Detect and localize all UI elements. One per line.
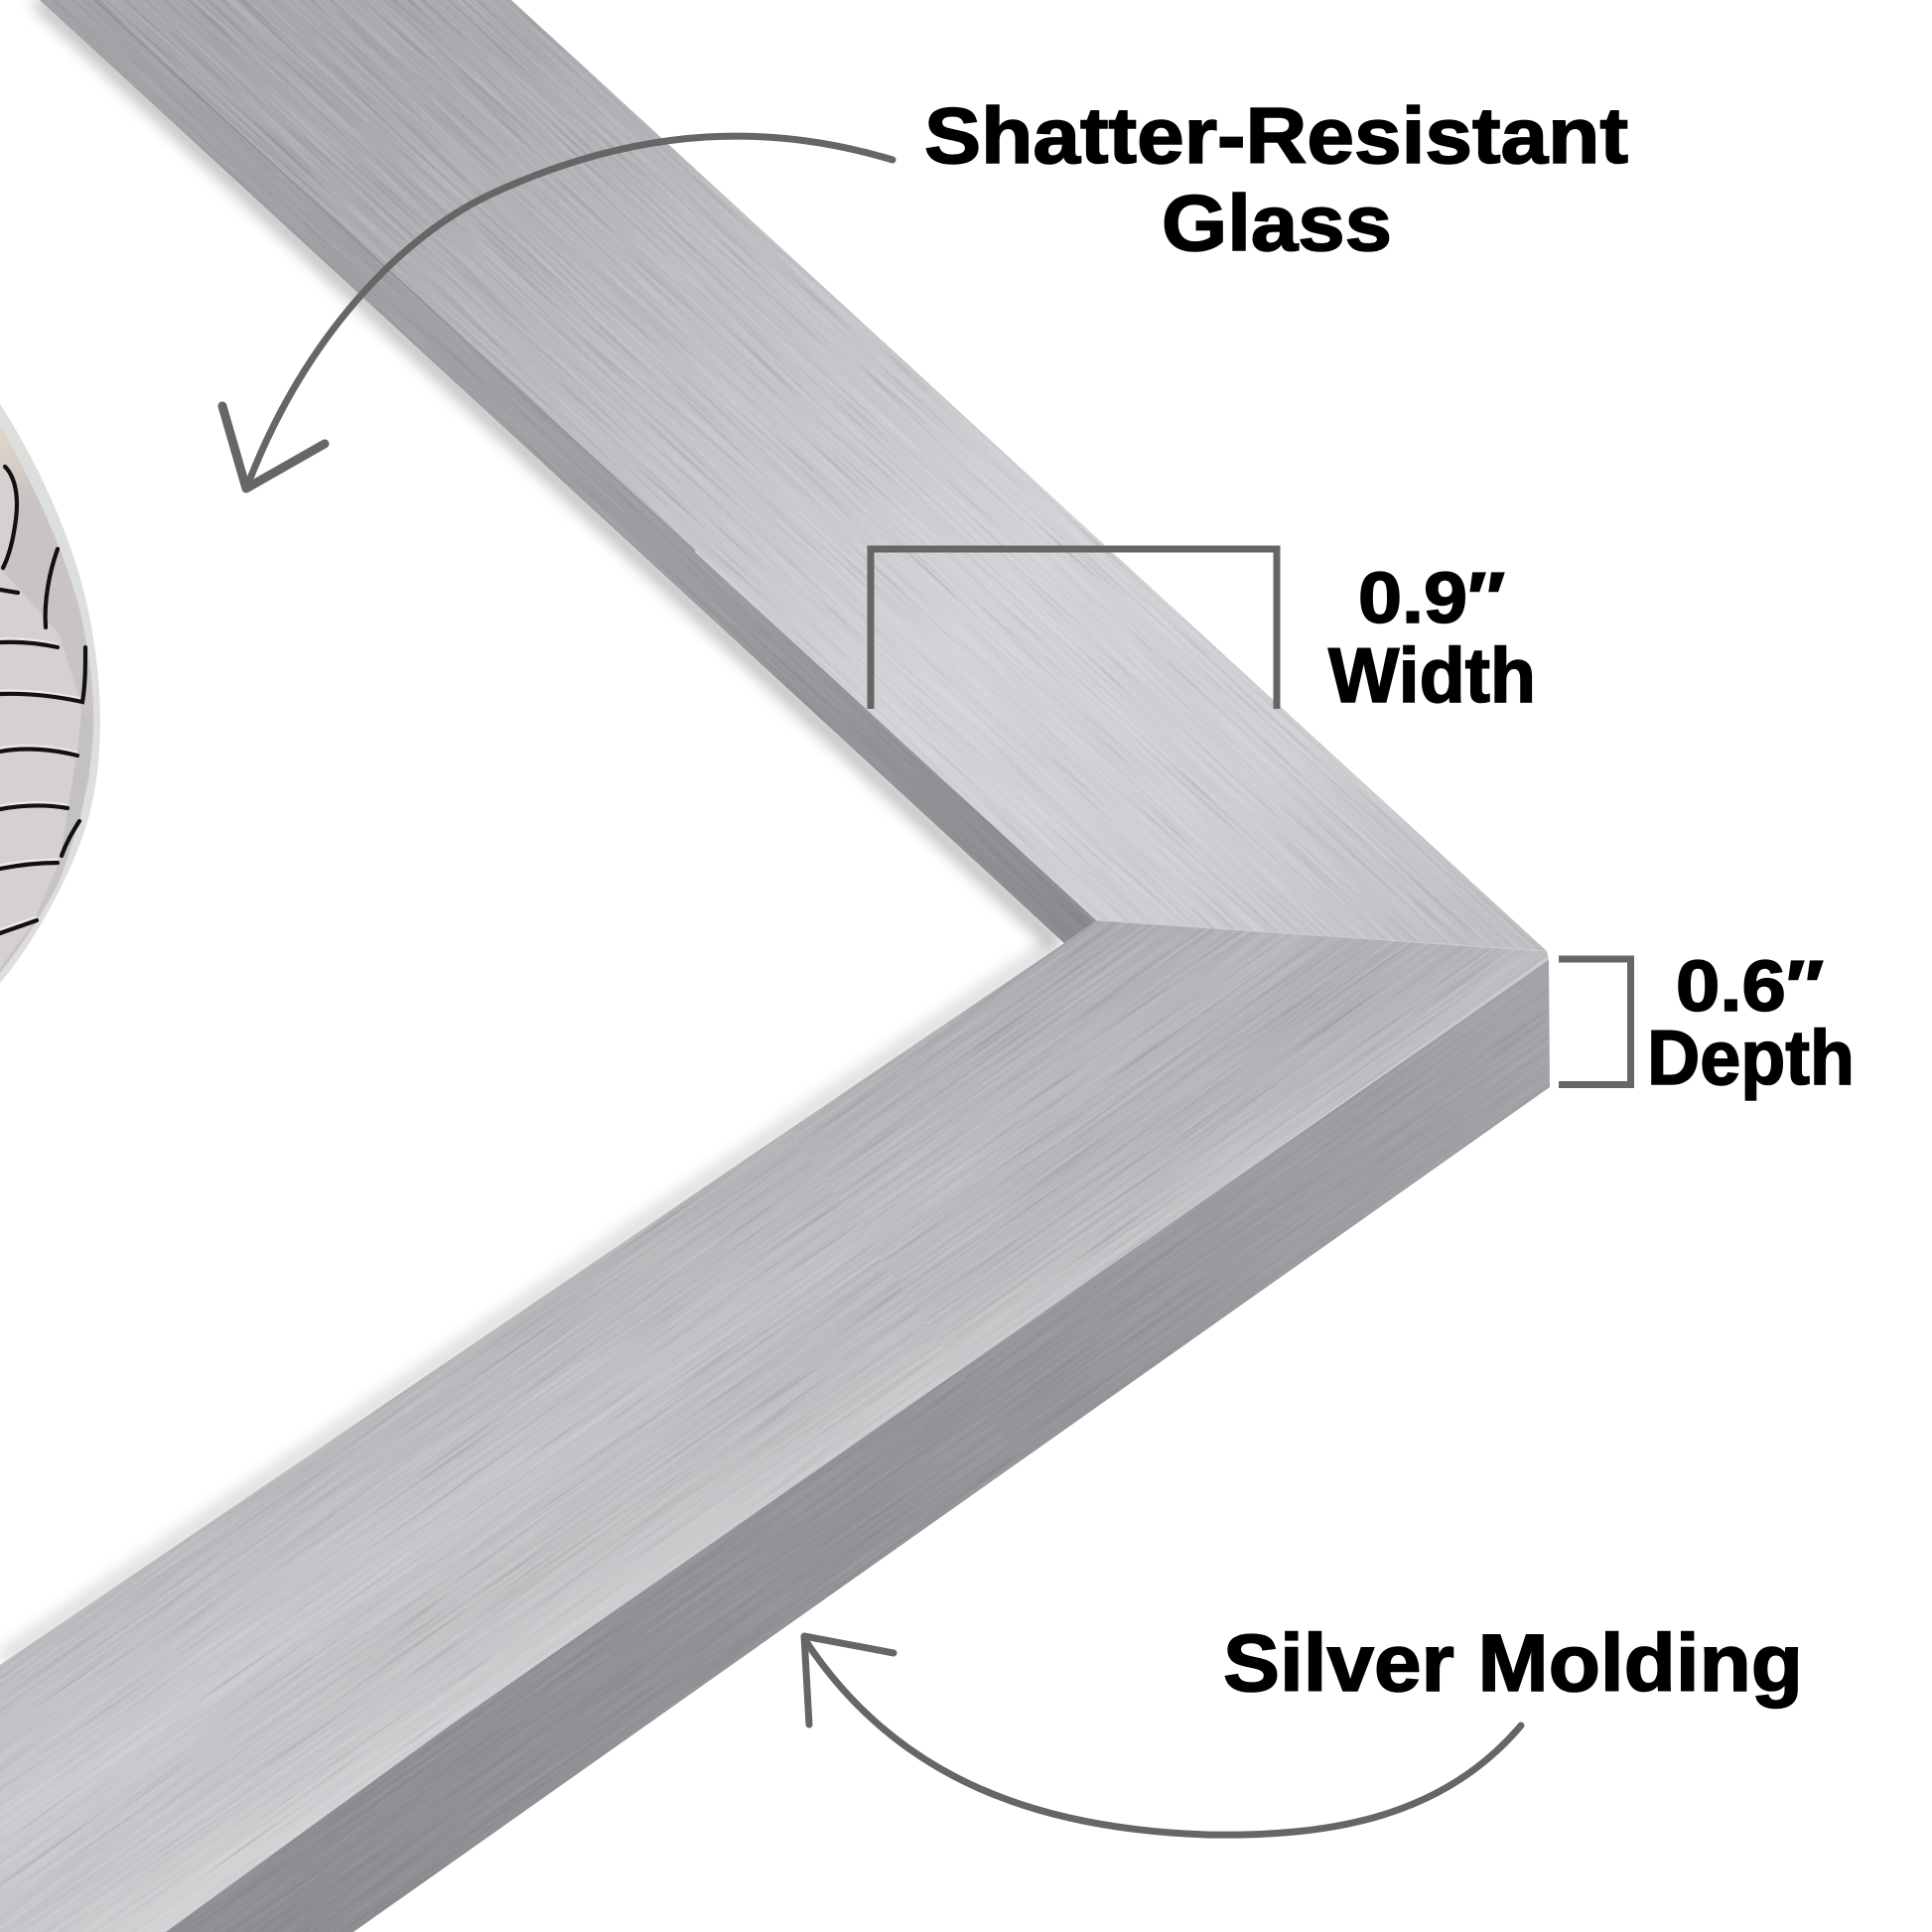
label: depth measurement: Depth xyxy=(1647,1014,1855,1101)
bracket: depth dimension xyxy=(1559,959,1630,1084)
bottom rail brushed surface xyxy=(0,920,1549,1932)
heading: shatter-resistant glass: Shatter-Resistant xyxy=(924,91,1628,180)
heading: shatter-resistant glass: Glass xyxy=(1162,179,1392,267)
heading: shatter-resistant glass xyxy=(924,91,1628,267)
arrow: to silver molding xyxy=(804,1636,1521,1835)
label: width measurement: Width xyxy=(1328,631,1536,719)
label: silver molding: Silver Molding xyxy=(1223,1618,1803,1709)
arrow: to shatter-resistant glass xyxy=(222,136,893,488)
picture fragment: round print behind glass xyxy=(0,404,100,983)
bracket: width dimension xyxy=(871,549,1277,709)
soft drop shadow under top rail xyxy=(38,0,1056,943)
label: width measurement xyxy=(1328,559,1536,719)
label: width measurement: 0.9″ xyxy=(1358,559,1505,638)
soft drop shadow under bottom rail xyxy=(0,943,1056,1660)
top rail inner bevel face xyxy=(40,0,1097,943)
top rail brushed surface xyxy=(94,0,1547,951)
label: depth measurement xyxy=(1647,947,1855,1101)
label: depth measurement: 0.6″ xyxy=(1676,947,1824,1027)
bottom rail outer side face xyxy=(166,960,1550,1932)
